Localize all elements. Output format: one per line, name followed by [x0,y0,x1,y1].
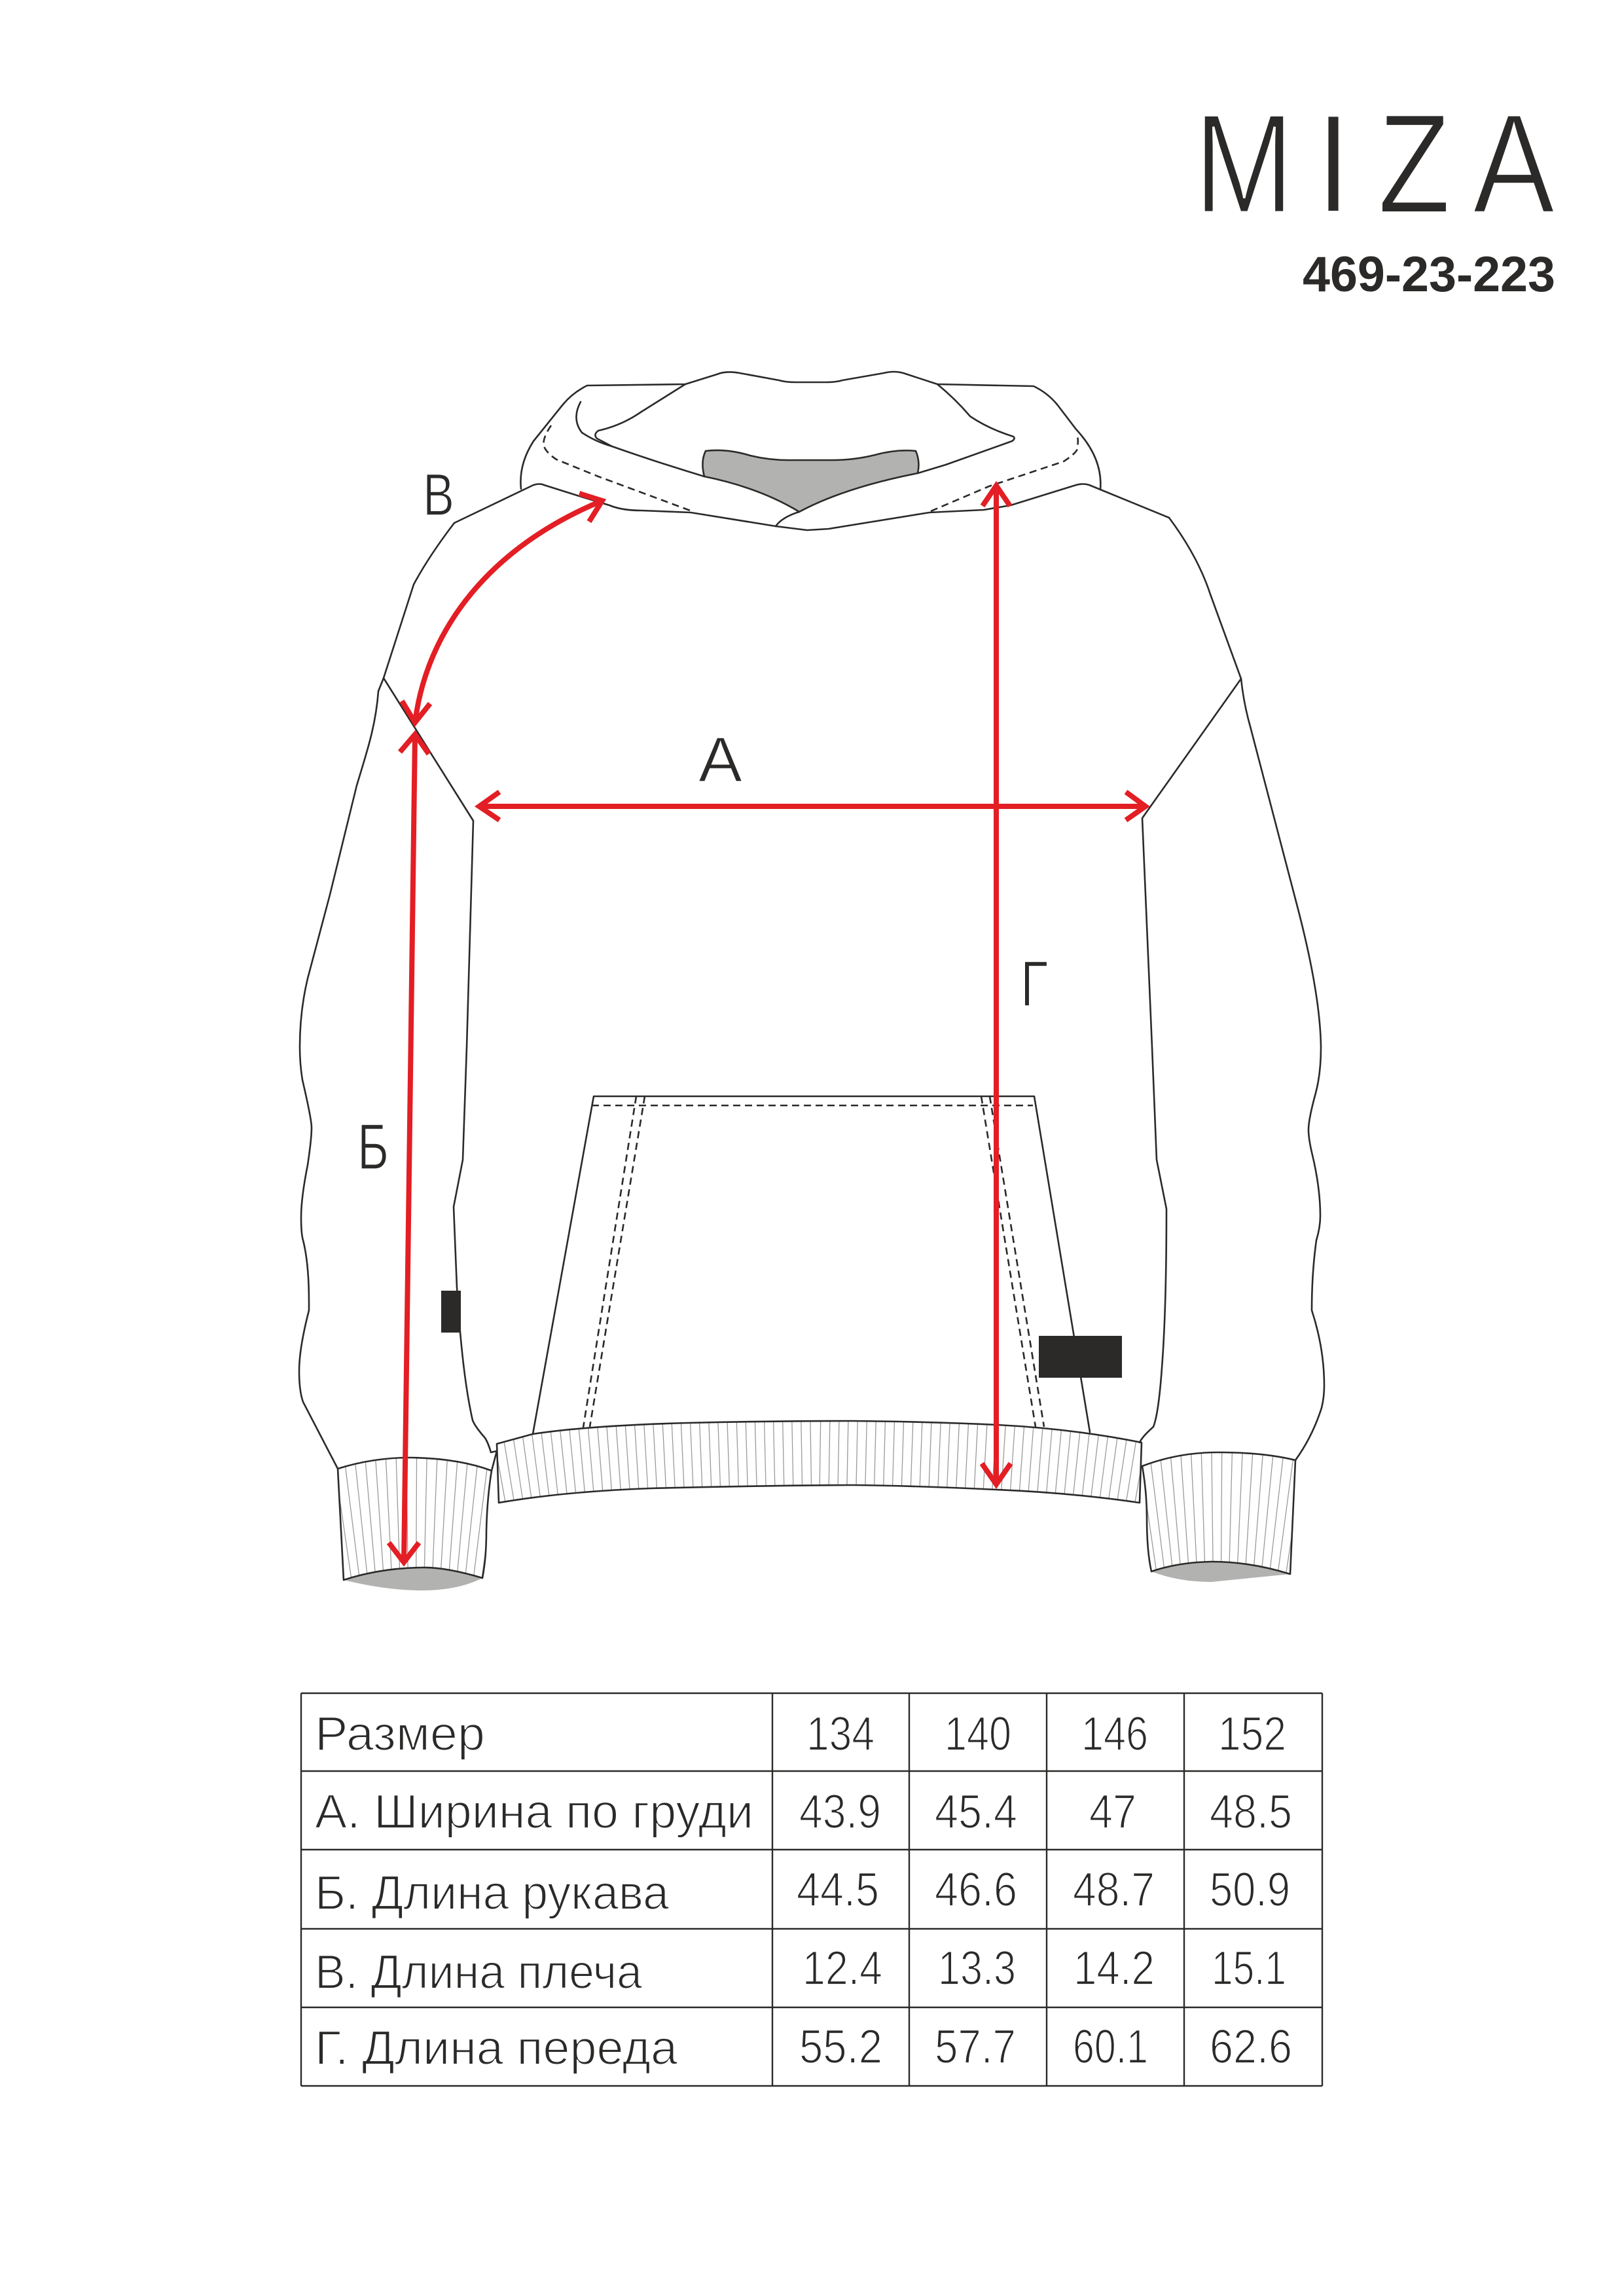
row: sleeve length: 50.9 [1210,1863,1290,1916]
row: shoulder length: 13.3 [938,1942,1016,1995]
row: shoulder length: 15.1 [1212,1942,1286,1995]
arrow: measurement A chest width [479,792,1146,820]
brand logo: I [1314,84,1353,242]
arrow: measurement В shoulder length [402,493,602,723]
row: chest width: 47 [1089,1785,1136,1839]
brand logo: M [1194,86,1294,243]
row: size header: 140 [945,1708,1011,1761]
hood inner fold [576,402,799,512]
row: size header [315,1708,1286,1761]
row: shoulder length: 12.4 [803,1942,882,1995]
row: shoulder length: 14.2 [1074,1942,1155,1995]
hood seam stitching [543,425,1078,511]
left cuff [334,1458,497,1590]
row: sleeve length: 44.5 [797,1863,879,1916]
row: chest width: 45.4 [935,1785,1017,1839]
row: size header: 134 [806,1708,875,1761]
row: front length [315,2020,1292,2075]
row: sleeve length: Б. Длина рукава [315,1867,669,1920]
article number: 469-23-223 [1303,247,1555,302]
row: sleeve length [315,1863,1290,1920]
hood inner opening [595,384,1015,526]
left sleeve inner edge [384,678,497,1471]
row: size header: Размер [315,1708,485,1761]
right cuff [1139,1452,1299,1582]
row: sleeve length: 48.7 [1073,1863,1155,1916]
right sleeve inner edge [1140,679,1241,1443]
hoodie technical drawing [299,372,1324,1590]
arrow: measurement Б sleeve length [389,734,429,1562]
measurement letter Г: Г [1020,948,1048,1020]
hood outline [520,372,1100,490]
row: front length: 62.6 [1210,2020,1292,2073]
waistband ribbing [491,1421,1149,1503]
left sleeve outer edge [299,523,454,1469]
right sleeve outer edge [1169,518,1324,1460]
row: front length: Г. Длина переда [315,2022,677,2075]
brand logo [1194,84,1555,243]
grey lining top edge [702,450,918,476]
right side label tag [1039,1336,1122,1378]
left side label tag [441,1291,461,1333]
arrow: measurement Г front length [982,486,1011,1484]
row: chest width [315,1785,1292,1839]
neckline and shoulders [454,484,1169,530]
row: front length: 57.7 [935,2020,1016,2073]
size table [301,1693,1322,2086]
brand logo: Z [1378,85,1451,243]
measurement letter В: В [423,462,454,528]
row: size header: 146 [1081,1708,1148,1761]
row: shoulder length: В. Длина плеча [315,1946,642,1999]
row: sleeve length: 46.6 [935,1863,1017,1916]
table grid [301,1693,1322,2086]
kangaroo pocket [533,1096,1090,1434]
neck opening grey lining [702,450,918,512]
row: front length: 55.2 [799,2020,882,2073]
row: size header: 152 [1218,1708,1286,1761]
brand logo: A [1473,84,1555,242]
row: chest width: А. Ширина по груди [315,1785,753,1839]
row: shoulder length [315,1942,1286,1999]
row: chest width: 48.5 [1210,1785,1292,1839]
row: front length: 60.1 [1073,2020,1148,2073]
measurement letter А: А [698,724,742,795]
pocket stitching [583,1096,1044,1427]
row: chest width: 43.9 [799,1785,881,1839]
measurement letter Б: Б [357,1111,389,1183]
